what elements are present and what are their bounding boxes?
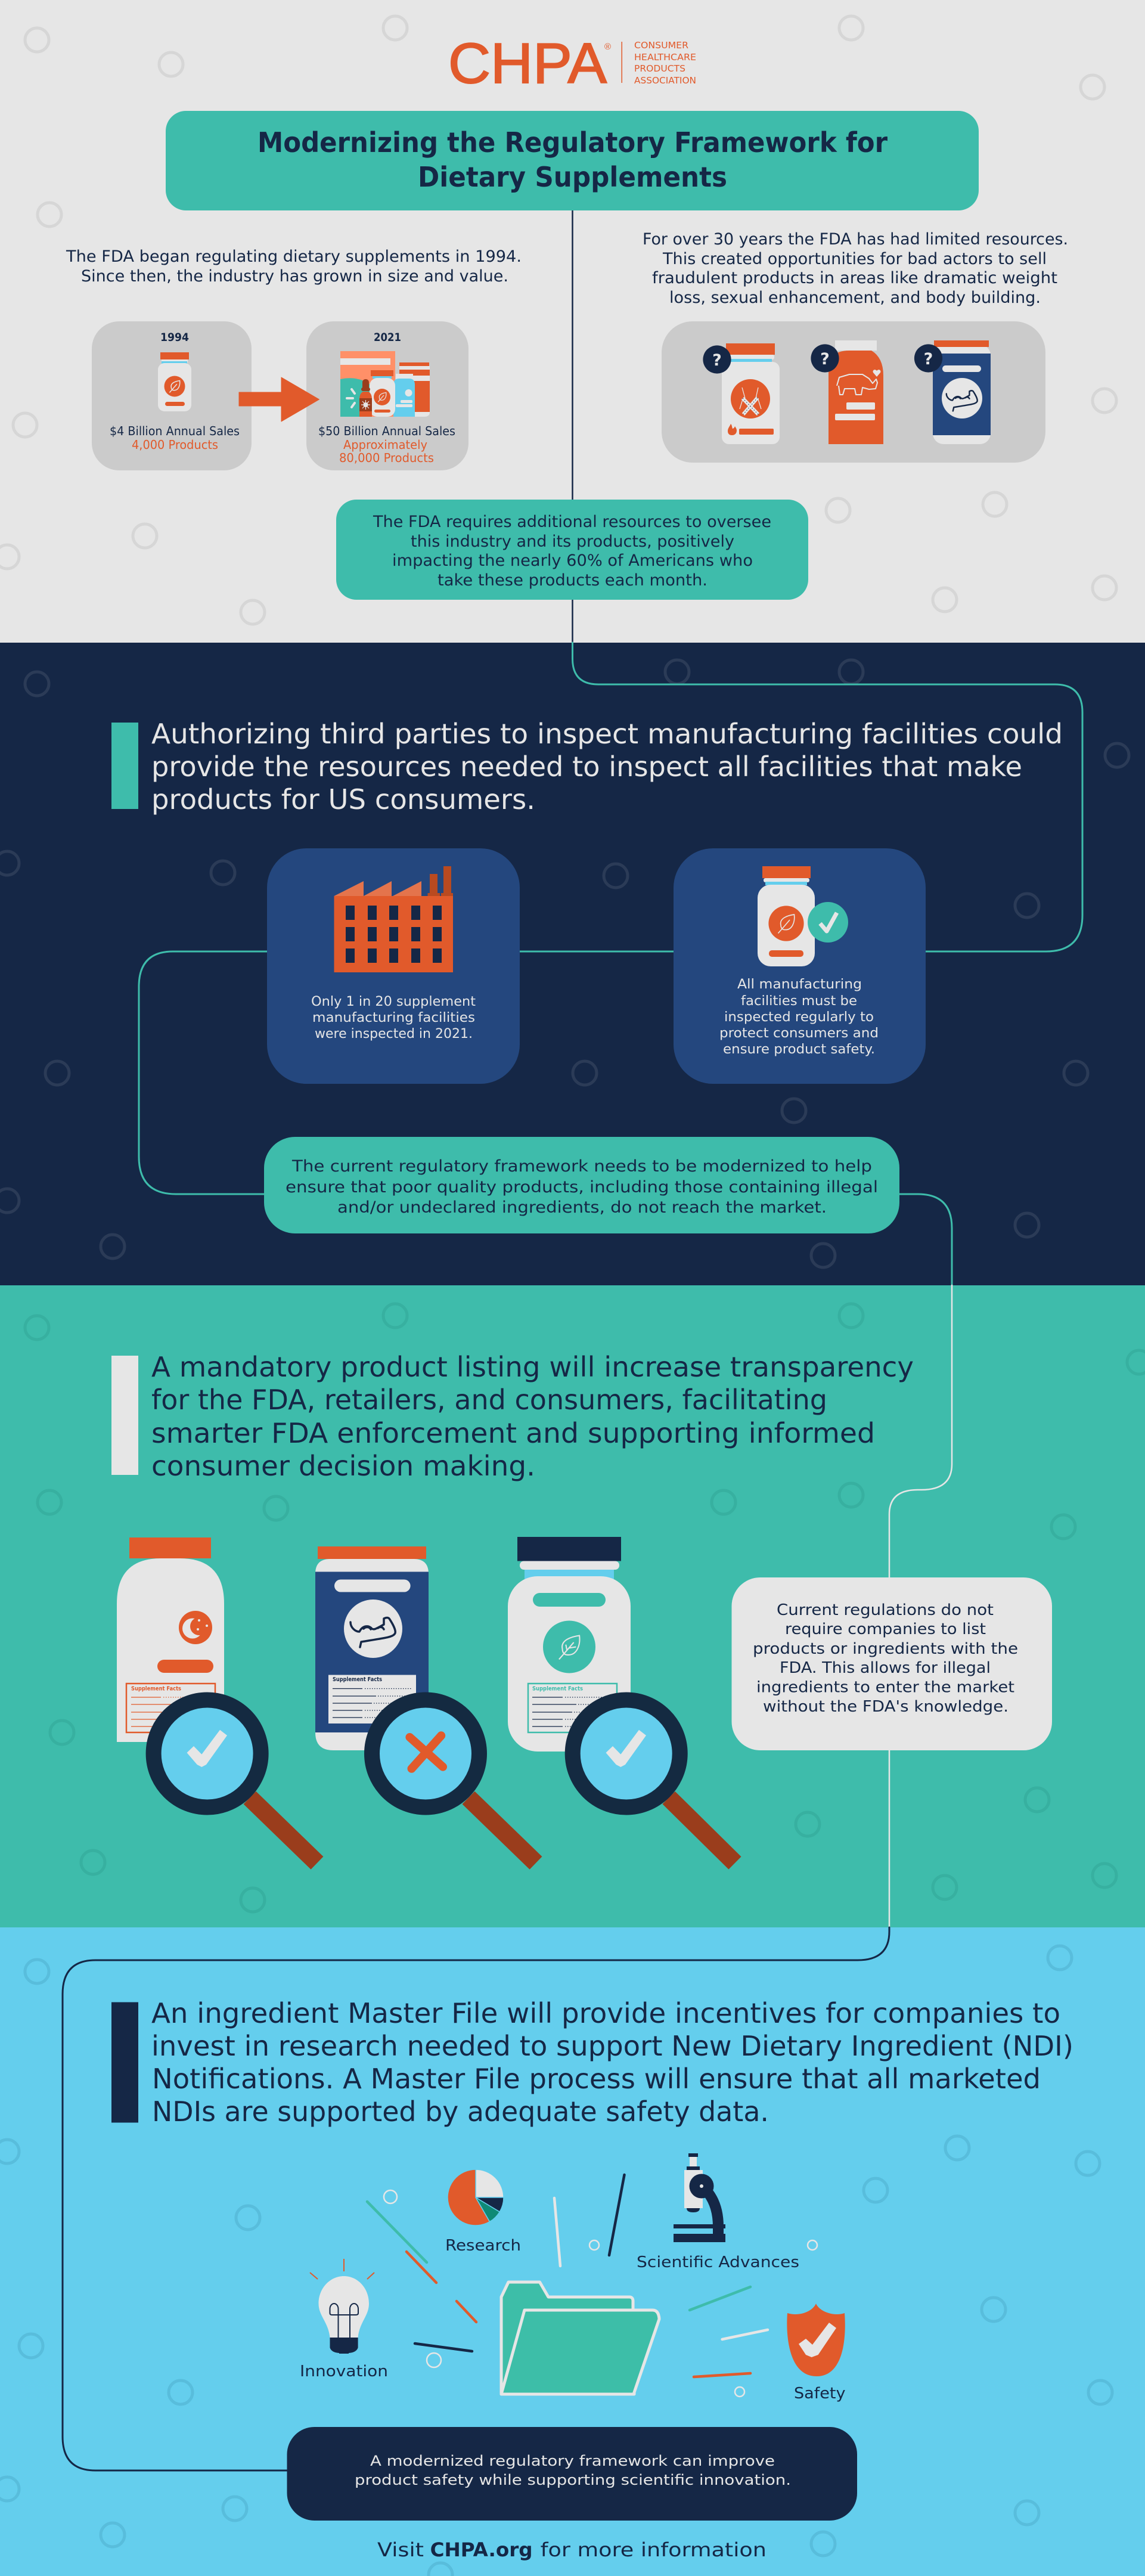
footer: visit CHPA.org: CHPA.org	[430, 2538, 533, 2561]
heading: mandatory product listing	[111, 1351, 914, 1482]
icon: sleep supplement bottle with label: Supplement Facts	[131, 1686, 181, 1692]
icon: botanical jar with label: Supplement Facts	[532, 1686, 583, 1692]
icon: weight loss bottle	[703, 343, 780, 444]
callout: current regulations: Current regulations do not	[777, 1601, 994, 1619]
panel: 1994: 4,000 Products	[132, 438, 218, 452]
panel: 1994	[92, 321, 252, 470]
icon: pie chart, research	[445, 2169, 521, 2255]
section 2 background	[0, 643, 1145, 1285]
intro text: left	[66, 247, 522, 286]
callout: framework needs modernizing	[264, 1137, 899, 1233]
heading: mandatory product listing: consumer decision making.	[151, 1450, 535, 1482]
callout: modernized framework	[287, 2427, 857, 2521]
section 4 background	[0, 1927, 1145, 2576]
panel: 2021: $50 Billion Annual Sales	[318, 424, 455, 438]
heading: ingredient master file: invest in research needed to support New Dietary Ingredient (NDI)	[151, 2030, 1073, 2062]
callout: FDA requires additional resources: take these products each month.	[437, 571, 708, 590]
icon: body building bottle with label: Supplement Facts	[333, 1676, 382, 1683]
panel: fraudulent products	[662, 321, 1045, 463]
footer: visit CHPA.org: Visit	[377, 2538, 424, 2561]
icon: magnifier with check	[573, 1700, 735, 1863]
callout: current regulations: FDA. This allows for illegal	[780, 1659, 991, 1677]
panel: all facilities inspected: ensure product safety.	[723, 1042, 875, 1057]
panel: all facilities inspected: All manufacturing	[737, 977, 862, 992]
logo: CHPA: HEALTHCARE	[634, 52, 696, 63]
icon: weight loss bottle: ?	[712, 351, 722, 370]
icon: folder, master file	[501, 2282, 659, 2394]
logo: CHPA: ASSOCIATION	[634, 75, 696, 86]
icon: magnifier with cross	[372, 1700, 536, 1863]
panel: all facilities inspected: protect consumers and	[719, 1026, 879, 1041]
icon: magnifier with check	[154, 1700, 317, 1863]
icon: sexual enhancement bottle	[811, 340, 883, 444]
master file streaks and dots	[367, 2175, 817, 2397]
panel: all facilities inspected: facilities must be	[741, 994, 857, 1009]
panel: factory: manufacturing facilities	[312, 1010, 475, 1025]
icon: 1994 bottle	[158, 352, 191, 411]
icon: light bulb, innovation: Innovation	[300, 2363, 388, 2380]
icon: shield, safety: Safety	[794, 2385, 845, 2403]
section 3 background	[0, 1285, 1145, 1927]
logo: CHPA: CHPA	[448, 32, 607, 95]
intro text: right: loss, sexual enhancement, and body building.	[669, 289, 1041, 307]
logo: CHPA: CONSUMER	[634, 40, 688, 51]
intro text: right: For over 30 years the FDA has had limited resources.	[643, 230, 1068, 249]
icon: shield, safety	[787, 2304, 845, 2403]
heading: mandatory product listing: smarter FDA enforcement and supporting informed	[151, 1417, 875, 1449]
heading: ingredient master file	[111, 1997, 1073, 2128]
connector line: flow through all sections	[63, 210, 1082, 2470]
arrow: growth 1994 to 2021	[239, 377, 319, 421]
panel: factory: Only 1 in 20 supplement	[311, 994, 476, 1009]
callout: current regulations	[732, 1577, 1052, 1750]
callout: framework needs modernizing: ensure that poor quality products, including those containing illegal	[286, 1178, 878, 1196]
icon: botanical jar with label	[508, 1537, 631, 1752]
heading: ingredient master file: Notifications. A Master File process will ensure that all marketed	[152, 2063, 1041, 2095]
logo: CHPA: ®	[604, 42, 611, 52]
callout: current regulations: ingredients to enter the market	[756, 1679, 1014, 1697]
heading: ingredient master file: NDIs are supported by adequate safety data.	[152, 2095, 769, 2128]
icon: 2021 product group	[340, 351, 430, 417]
icon: approved bottle	[758, 866, 848, 966]
intro text: right: fraudulent products in areas like dramatic weight	[652, 269, 1057, 287]
panel: all facilities inspected	[674, 848, 926, 1084]
callout: current regulations: require companies to list	[785, 1620, 986, 1638]
intro text: right: This created opportunities for bad actors to sell	[662, 250, 1047, 268]
callout: FDA requires additional resources	[336, 500, 808, 600]
title banner	[166, 111, 979, 210]
panel: 1994: $4 Billion Annual Sales	[110, 424, 240, 438]
callout: FDA requires additional resources: impacting the nearly 60% of Americans who	[392, 551, 753, 570]
callout: FDA requires additional resources: The FDA requires additional resources to oversee	[373, 513, 771, 531]
icon: sleep supplement bottle with label	[117, 1537, 224, 1742]
logo: CHPA	[448, 32, 696, 95]
title banner: Modernizing the Regulatory Framework for	[257, 126, 888, 159]
intro text: left: The FDA began regulating dietary supplements in 1994.	[66, 247, 522, 266]
section 1 background	[0, 0, 1145, 643]
callout: framework needs modernizing: The current regulatory framework needs to be modernized to help	[291, 1157, 872, 1176]
callout: modernized framework: product safety while supporting scientific innovation.	[355, 2472, 791, 2488]
heading: third party inspections: provide the resources needed to inspect all facilities that make	[151, 751, 1022, 783]
logo: CHPA: PRODUCTS	[634, 63, 685, 74]
callout: framework needs modernizing: and/or undeclared ingredients, do not reach the market.	[337, 1198, 827, 1217]
intro text: left: Since then, the industry has grown in size and value.	[81, 267, 508, 286]
intro text: right	[643, 230, 1068, 307]
callout: FDA requires additional resources: this industry and its products, positively	[411, 532, 734, 551]
callout: current regulations: without the FDA's knowledge.	[763, 1698, 1009, 1716]
callout: current regulations: products or ingredients with the	[753, 1640, 1018, 1658]
callout: modernized framework: A modernized regulatory framework can improve	[370, 2453, 775, 2469]
heading: third party inspections: Authorizing third parties to inspect manufacturing facilities could	[151, 718, 1063, 750]
icon: body building bottle: ?	[924, 350, 933, 368]
icon: body building bottle with label	[315, 1546, 429, 1750]
panel: all facilities inspected: inspected regularly to	[724, 1010, 874, 1025]
heading: third party inspections: products for US consumers.	[151, 783, 535, 816]
footer: visit CHPA.org: for more information	[541, 2538, 767, 2561]
title banner: Dietary Supplements	[418, 161, 727, 193]
panel: 1994: 1994	[160, 331, 189, 344]
icon: factory	[334, 866, 453, 972]
heading: third party inspections	[111, 718, 1063, 816]
panel: 2021: 80,000 Products	[339, 451, 434, 465]
icon: microscope, scientific advances: Scientific Advances	[637, 2253, 799, 2271]
heading: mandatory product listing: A mandatory product listing will increase transparency	[151, 1351, 914, 1383]
panel: 2021	[306, 321, 468, 470]
heading: ingredient master file: An ingredient Master File will provide incentives for companies to	[151, 1997, 1060, 2029]
panel: 2021: Approximately	[343, 438, 427, 452]
icon: microscope, scientific advances	[637, 2153, 799, 2271]
icon: sexual enhancement bottle: ?	[820, 350, 830, 368]
panel: factory	[267, 848, 520, 1084]
icon: light bulb, innovation	[300, 2259, 388, 2380]
icon: pie chart, research: Research	[445, 2237, 521, 2255]
panel: factory: were inspected in 2021.	[315, 1027, 473, 1041]
icon: body building bottle	[914, 340, 991, 444]
panel: 2021: 2021	[374, 331, 401, 344]
heading: mandatory product listing: for the FDA, retailers, and consumers, facilitating	[151, 1384, 827, 1416]
